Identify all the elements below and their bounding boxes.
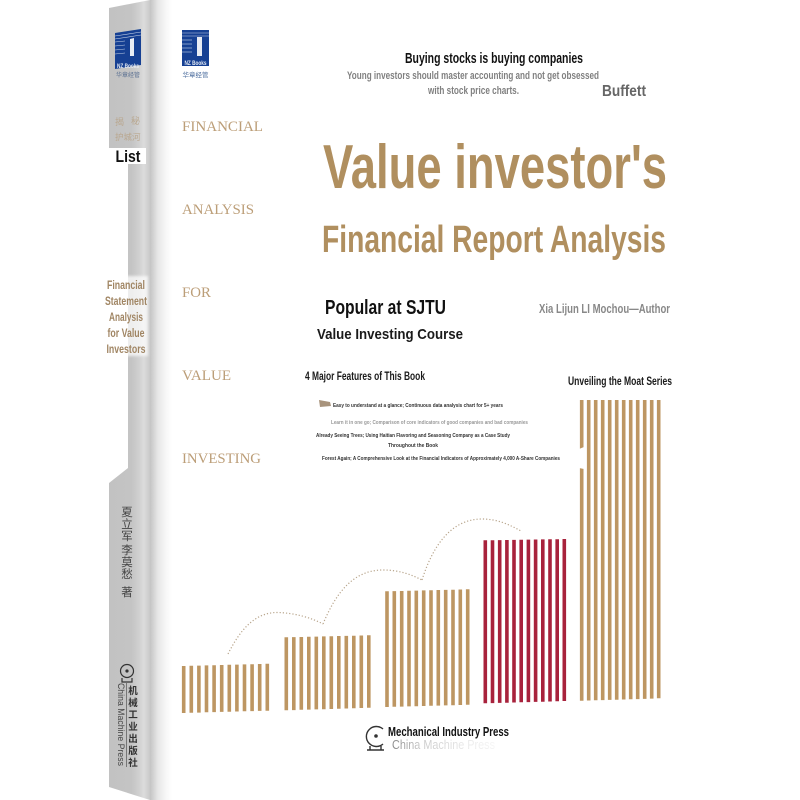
spine faded Chinese title: 秘 [131,115,140,126]
features list: Learn it in one go; Comparison of core indicators of good companies and bad companies [331,420,528,426]
quote heading: Buying stocks is buying companies [405,50,583,67]
gear centre star [374,734,378,738]
publisher label: Mechanical Industry Press [388,725,509,739]
panel: book spine [105,0,172,800]
spine faded Chinese title [115,115,141,142]
spine authors: 军 [121,530,133,543]
bar group 1 [184,664,267,713]
features heading: 4 Major Features of This Book [305,369,425,383]
spine authors: 愁 [121,568,133,581]
icon: spine publisher logo [115,29,141,79]
spine authors: 著 [121,585,133,599]
icon: spine gear [120,664,134,682]
features list: Easy to understand at a glance; Continuous data analysis chart for 5+ years [333,403,503,409]
spine authors: 莫 [121,556,133,569]
spine label: List: List [116,147,141,166]
features list: Forest Again; A Comprehensive Look at the Financial Indicators of Approximately 4,000 A-Share Companies [322,456,560,462]
cover serif English title: FOR [182,285,211,301]
spine publisher [115,683,138,769]
features list: Throughout the Book [388,443,439,449]
chart: rising bars [184,400,659,713]
spine publisher: 机 [128,685,138,697]
icon: cover publisher logo: NZ Books [184,60,207,67]
spine authors: 夏 [121,506,133,519]
features list [316,403,560,462]
cover serif English title: FINANCIAL [182,119,263,135]
quote body [347,70,599,97]
cover serif English title [182,119,263,467]
icon: spine publisher logo: NZ Books [117,63,139,70]
icon: cover publisher logo [182,30,209,79]
authors: Xia Lijun LI Mochou—Author [539,301,670,316]
subtitle: Financial Report Analysis [322,219,666,261]
spine title text: Statement [105,296,147,308]
course label: Popular at SJTU [325,297,446,319]
cover serif English title: ANALYSIS [182,202,254,218]
spine publisher: 出 [128,733,138,745]
blurred English publisher: China Machine Press [392,737,495,752]
spine title text: for Value [108,328,144,340]
main title: Value investor's [323,133,667,202]
spine title text [105,280,147,356]
spine authors [121,506,133,599]
course name: Value Investing Course [317,326,463,343]
spine title text: Investors [106,344,146,356]
bar group 3 [387,589,468,707]
spine text patch [105,276,148,356]
spine publisher: 业 [128,721,138,733]
spine authors: 立 [121,517,133,531]
spine white overlay patch [109,148,146,483]
spine faded Chinese title: 揭 [115,116,124,127]
cover serif English title: VALUE [182,368,231,384]
bar group 5 [582,400,659,701]
spine title text: Financial [107,280,145,292]
smear over publisher name [384,732,500,751]
features list: Already Seeing Trees; Using Haitian Flavoring and Seasoning Company as a Case Study [316,433,511,439]
icon: cover gear [366,726,384,750]
bar group 4 red [485,539,564,703]
spine publisher: China Machine Press [115,683,126,766]
spine publisher: 工 [128,710,138,721]
icon: cover publisher logo: 华章经管 [182,70,209,79]
cover serif English title: INVESTING [182,451,261,467]
icon: spine publisher logo: 华章经管 [116,71,140,79]
spine publisher: 版 [128,745,138,757]
spine publisher: 械 [128,697,138,709]
spine publisher: 社 [128,757,138,769]
dotted growth arcs [228,519,521,654]
series label: Unveiling the Moat Series [568,374,672,388]
icon: small flag [319,400,331,407]
quote attribution: Buffett [602,83,647,100]
cover publisher block [366,725,509,752]
quote body: Young investors should master accounting and not get obsessed [347,70,599,82]
spine authors: 李 [121,543,133,557]
spine title text: Analysis [109,312,143,324]
notch on tall bar [574,447,584,469]
bar group 2 [286,635,369,710]
quote body: with stock price charts. [427,85,519,97]
spine faded Chinese title: 护城河 [115,132,141,142]
